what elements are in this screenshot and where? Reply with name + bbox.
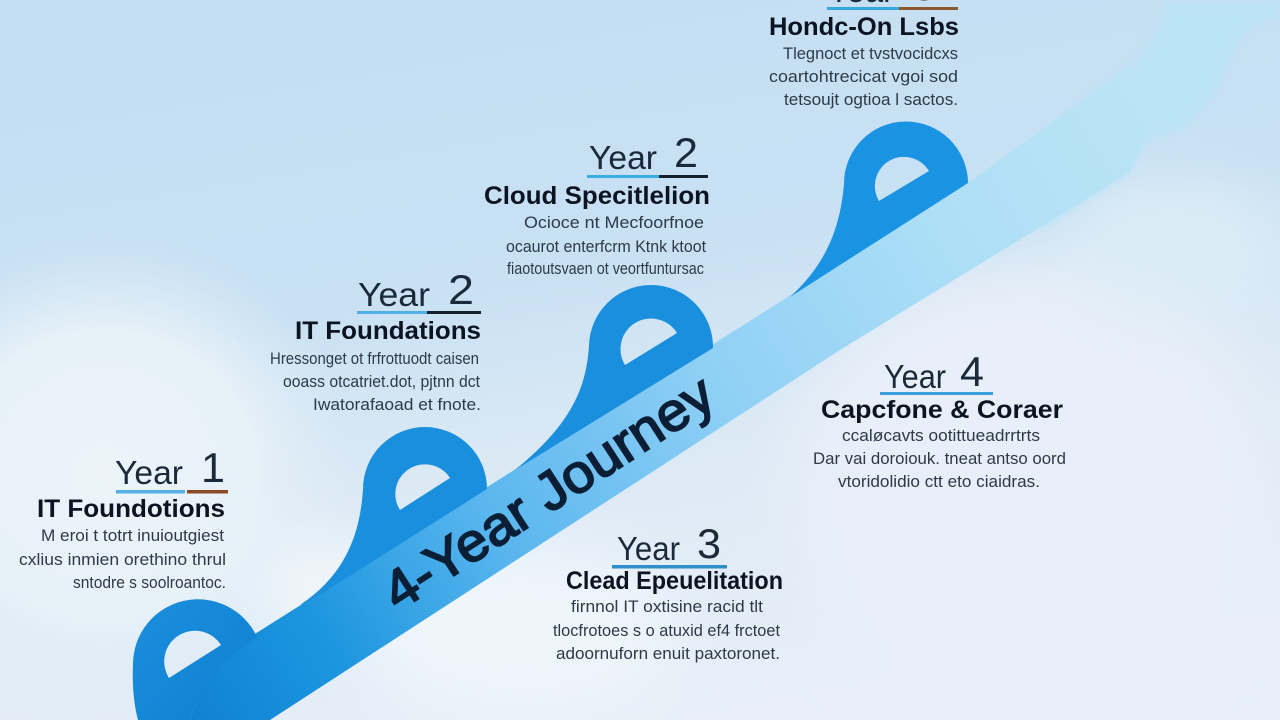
block: Year 1 IT Foundations: M eroi t totrt inuioutgiest — [41, 526, 224, 545]
pin 2 — [300, 427, 487, 605]
clouds — [260, 180, 1275, 718]
block: Year 3 Hands-On Labs — [769, 0, 959, 109]
block: Year 3 Cloud Specialization: tlocfrotoes s o atuxid ef4 frctoet — [553, 621, 780, 640]
block: Year 2 Cloud Specialization: Year — [589, 139, 657, 176]
block: Year 3 Hands-On Labs: Hondc-On Lsbs — [769, 13, 959, 41]
block: Year 2 Cloud Specialization — [484, 129, 710, 278]
block: Year 2 Cloud Specialization: fiaotoutsvaen ot veortfuntursac — [507, 259, 704, 278]
block: Year 2 Cloud Specialization: ocaurot enterfcrm Ktnk ktoot — [506, 237, 706, 256]
block: Year 3 Cloud Specialization — [553, 520, 783, 663]
block: Year 2 IT Foundations: IT Foundations — [295, 317, 481, 345]
ribbon title: 4-Year Journey — [372, 364, 725, 622]
block: Year 1 IT Foundations: 1 — [201, 444, 225, 491]
block: Year 1 IT Foundations: Year — [115, 454, 183, 491]
left cloud bank — [0, 230, 520, 720]
block: Year 2 Cloud Specialization: 2 — [674, 129, 698, 176]
pin 3 — [515, 285, 713, 470]
block: Year 3 Cloud Specialization: Clead Epeuelitation — [566, 567, 783, 595]
block: Year 3 Cloud Specialization: Year — [617, 530, 680, 567]
block: Year 3 Hands-On Labs: Tlegnoct et tvstvocidcxs — [783, 44, 958, 63]
block: Year 3 Cloud Specialization: firnnol IT oxtisine racid tlt — [571, 597, 763, 616]
block: Year 3 Cloud Specialization: adoornuforn enuit paxtoronet. — [556, 644, 780, 663]
block: Year 2 IT Foundations: Hressonget ot frfrottuodt caisen — [270, 349, 479, 368]
block: Year 4 Capstone and Career: ccaløcavts ootittueadrrtrts — [842, 426, 1040, 445]
block: Year 4 Capstone and Career: Dar vai doroiouk. tneat antso oord — [813, 449, 1066, 468]
upper right light ribbon extension — [1000, 0, 1280, 230]
block: Year 4 Capstone and Career: Capcfone & Coraer — [821, 396, 1063, 424]
block: Year 3 Hands-On Labs: tetsoujt ogtioa l sactos. — [784, 90, 958, 109]
block: Year 4 Capstone and Career: vtoridolidio ctt eto ciaidras. — [838, 472, 1040, 491]
block: Year 1 IT Foundations: sntodre s soolroantoc. — [73, 573, 226, 592]
block: Year 2 IT Foundations: Iwatorafaoad et fnote. — [313, 395, 481, 414]
block: Year 2 IT Foundations — [270, 266, 481, 414]
block: Year 1 IT Foundations — [19, 444, 228, 592]
block: Year 1 IT Foundations: cxlius inmien orethino thrul — [19, 550, 226, 569]
block: Year 1 IT Foundations: IT Foundotions — [37, 495, 225, 523]
block: Year 2 IT Foundations: 2 — [448, 266, 474, 313]
block: Year 3 Hands-On Labs: coartohtrecicat vgoi sod — [769, 67, 958, 86]
block: Year 2 Cloud Specialization: Cloud Specitlelion — [484, 182, 710, 210]
pin 1 — [133, 599, 257, 720]
block: Year 2 Cloud Specialization: Ocioce nt Mecfoorfnoe — [524, 213, 704, 232]
pin 4 — [790, 121, 968, 297]
block: Year 2 IT Foundations: ooass otcatriet.dot, pjtnn dct — [283, 372, 480, 391]
block: Year 4 Capstone and Career: Year — [884, 358, 946, 395]
block: Year 4 Capstone and Career: 4 — [960, 348, 984, 395]
block: Year 2 IT Foundations: Year — [358, 276, 430, 313]
block: Year 4 Capstone and Career — [813, 348, 1066, 491]
block: Year 3 Cloud Specialization: 3 — [697, 520, 721, 567]
